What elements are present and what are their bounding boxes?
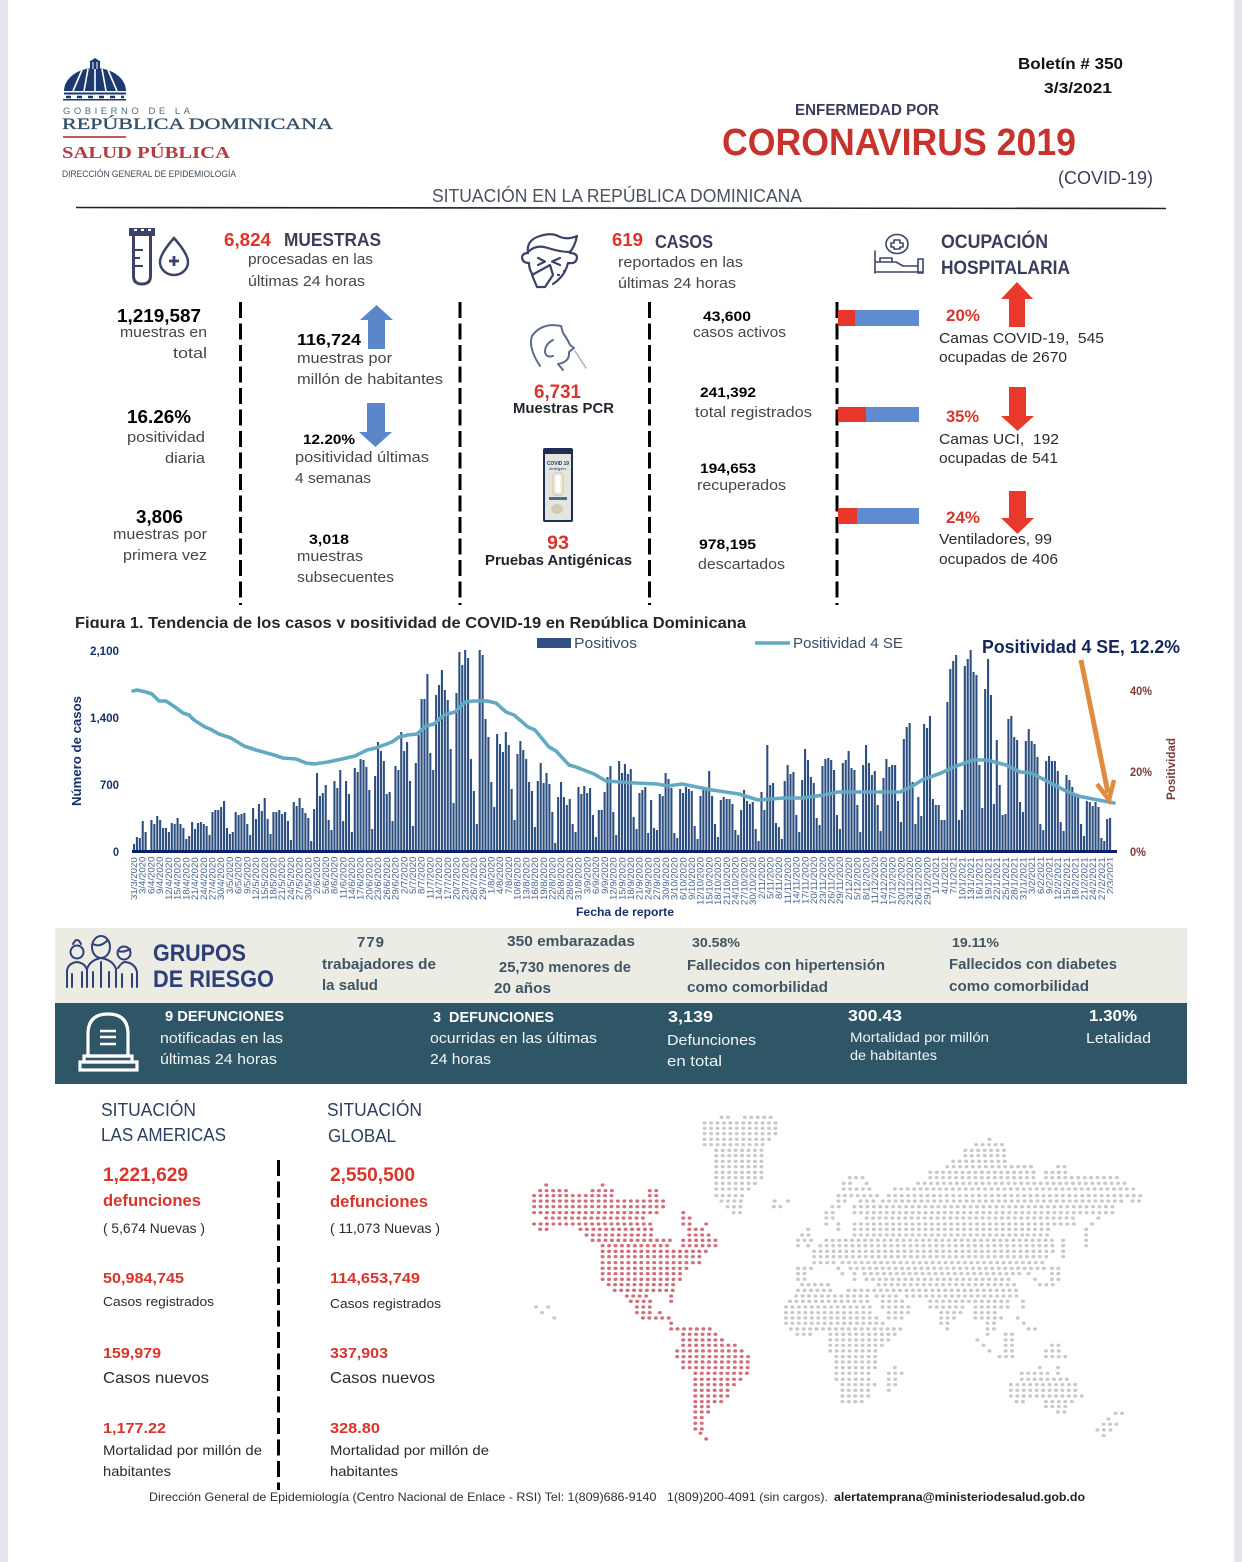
stat: embarazadas y menores [494, 933, 635, 997]
title: (COVID-19) [1058, 168, 1153, 188]
stat: pruebas antigénicas [485, 533, 632, 569]
stat: 9 defunciones [160, 1008, 284, 1068]
stat: casos activos [693, 308, 786, 341]
stat: descartados: 978,195 [699, 536, 756, 552]
chart: casos y positividad [69, 635, 1180, 919]
world map: dotted [534, 1117, 1141, 1439]
stat: trabajadores de la salud: trabajadores de [322, 956, 436, 973]
heading: global: SITUACIÓN [327, 1099, 422, 1120]
stat: primera vez: 3,806 [136, 507, 183, 527]
icon: antigen test kit: Antigen [549, 466, 566, 471]
stat: positividad 4 semanas [295, 431, 429, 487]
heading: grupos de riesgo [153, 940, 274, 993]
logo: gobierno de la república dominicana: GOBIERNO DE LA [63, 106, 191, 117]
header: muestras: últimas 24 horas [248, 273, 365, 290]
stat: mortalidad por millón: de habitantes [850, 1047, 937, 1063]
map: rest of the world [536, 1117, 1141, 1436]
map: the americas [534, 1185, 754, 1439]
left axis labels: 1,400 [90, 711, 119, 725]
footer [149, 1490, 1085, 1504]
heading: las américas: LAS AMERICAS [101, 1125, 226, 1145]
left axis labels [69, 644, 119, 859]
stat: camas covid-19: ocupadas de 2670 [939, 349, 1067, 366]
stat: casos nuevos américas [103, 1345, 209, 1387]
stat: mortalidad américas: habitantes [103, 1463, 171, 1479]
stat: embarazadas y menores: 350 embarazadas [507, 933, 635, 950]
stat: trabajadores de la salud: la salud [322, 977, 378, 994]
stat: positividad 4 semanas: 12.20% [303, 431, 356, 447]
legend [537, 635, 903, 652]
stat: positividad diaria: positividad [127, 429, 205, 446]
stat: casos registrados global: Casos registrados [330, 1296, 442, 1311]
stat: diabetes: como comorbilidad [949, 978, 1089, 995]
left axis labels: 0 [113, 845, 119, 859]
right axis labels [1130, 684, 1178, 859]
heading: ocupación hospitalaria: OCUPACIÓN [941, 231, 1048, 253]
stat: defunciones américas [103, 1165, 205, 1236]
stat: muestras en total: 1,219,587 [117, 306, 201, 326]
title: CORONAVIRUS 2019 [722, 122, 1076, 164]
stat: camas covid-19 [939, 306, 1104, 366]
icon: antigen test kit: COVID 19 [547, 461, 569, 467]
icon: antigen test kit [543, 448, 573, 522]
heading: las américas: SITUACIÓN [101, 1099, 196, 1120]
stat: total registrados: 241,392 [700, 384, 756, 400]
legend: Positividad 4 SE [793, 635, 903, 652]
stat: defunciones en total: en total [667, 1053, 722, 1070]
stat: pruebas antigénicas: Pruebas Antigénicas [485, 552, 632, 569]
panel: defunciones [55, 1003, 1187, 1084]
stat: casos registrados américas: Casos registrados [103, 1294, 215, 1309]
logo: gobierno de la república dominicana: DIRECCIÓN GENERAL DE EPIDEMIOLOGÍA [62, 169, 236, 179]
stat: mortalidad por millón: Mortalidad por millón [850, 1029, 989, 1045]
stat: letalidad [1086, 1008, 1151, 1047]
stat: total registrados [695, 384, 812, 421]
stat: letalidad: 1.30% [1089, 1008, 1137, 1025]
bar: camas uci [838, 407, 919, 422]
stat: casos activos: casos activos [693, 324, 786, 341]
stat: por millón [297, 332, 443, 388]
stat: casos nuevos américas: 159,979 [103, 1345, 161, 1362]
panel: casos [485, 230, 812, 573]
heading: figura 1: Figura 1. Tendencia de los casos y positividad de COVID-19 en República Dominicana [75, 615, 746, 632]
stat: subsecuentes: subsecuentes [297, 569, 394, 586]
stat: 9 defunciones: notificadas en las [160, 1030, 283, 1047]
arrow: down blue [359, 403, 392, 447]
stat: muestras en total: total [173, 345, 207, 362]
heading: global: GLOBAL [328, 1126, 396, 1146]
stat: defunciones américas: 1,221,629 [103, 1165, 188, 1186]
stat: por millón: 116,724 [297, 332, 361, 349]
header: casos: 619 [612, 230, 643, 250]
icon: tombstone [80, 1014, 137, 1070]
stat: camas covid-19: Camas COVID-19, 545 [939, 330, 1104, 347]
stat: 9 defunciones: 9 DEFUNCIONES [165, 1008, 284, 1025]
stat: casos nuevos américas: Casos nuevos [103, 1370, 209, 1387]
right axis labels: 0% [1130, 845, 1146, 859]
stat: casos nuevos global: Casos nuevos [330, 1370, 435, 1387]
stat: camas uci: Camas UCI, 192 [939, 431, 1059, 448]
stat: 3 defunciones: 3 DEFUNCIONES [433, 1009, 554, 1026]
stat: subsecuentes [297, 531, 394, 586]
stat: casos nuevos global [330, 1345, 435, 1387]
stat: defunciones américas: defunciones [103, 1191, 201, 1210]
left axis labels: 2,100 [90, 644, 119, 658]
stat: 3 defunciones [430, 1009, 597, 1068]
title [722, 102, 1153, 188]
stat: mortalidad global: 328.80 [330, 1420, 380, 1437]
header: casos: últimas 24 horas [618, 275, 736, 292]
panel: grupos de riesgo [55, 928, 1187, 1003]
stat: defunciones global: ( 11,073 Nuevas ) [330, 1220, 440, 1236]
right axis labels: 20% [1130, 765, 1152, 779]
icon: hospital bed [875, 234, 923, 273]
header: muestras: MUESTRAS [284, 230, 381, 250]
footer: alertatemprana@ministeriodesalud.gob.do [834, 1490, 1085, 1504]
stat: camas covid-19: 20% [946, 306, 980, 325]
panel: ocupación hospitalaria [838, 231, 1104, 568]
stat: defunciones américas: ( 5,674 Nuevas ) [103, 1220, 205, 1236]
stat: recuperados: 194,653 [700, 460, 756, 476]
arrow: down red [1001, 387, 1034, 431]
stat: positividad diaria: diaria [165, 450, 206, 467]
stat: 3 defunciones: ocurridas en las últimas [430, 1030, 597, 1047]
stat: muestras pcr [513, 382, 614, 417]
stat: descartados: descartados [698, 556, 785, 573]
stat: camas uci: 35% [946, 407, 979, 426]
stat: diabetes: Fallecidos con diabetes [949, 956, 1117, 973]
bars: positivos [134, 650, 1110, 851]
bar: camas covid [838, 310, 919, 326]
icon: people [67, 936, 137, 987]
stat: positividad 4 semanas: positividad últimas [295, 449, 429, 466]
stat: subsecuentes: muestras [297, 548, 363, 565]
stat: hipertensión [687, 935, 885, 996]
header: casos [612, 230, 743, 292]
line: positividad 4 se [133, 690, 1114, 803]
stat: casos registrados global: 114,653,749 [330, 1270, 420, 1287]
stat: muestras pcr: 6,731 [534, 382, 581, 403]
heading: las américas [101, 1099, 226, 1145]
heading: ocupación hospitalaria [941, 231, 1070, 279]
stat: mortalidad global: habitantes [330, 1463, 398, 1479]
stat: positividad 4 semanas: 4 semanas [295, 470, 371, 487]
stat: mortalidad américas: 1,177.22 [103, 1420, 166, 1437]
stat: hipertensión: 30.58% [692, 935, 740, 950]
arrow: up red [1001, 282, 1033, 327]
stat: casos nuevos global: 337,903 [330, 1345, 388, 1362]
stat: muestras en total: muestras en [120, 324, 207, 341]
stat: trabajadores de la salud: 779 [357, 934, 384, 951]
stat: primera vez [113, 507, 207, 564]
heading: ocupación hospitalaria: HOSPITALARIA [941, 258, 1070, 279]
legend: Positivos [574, 635, 637, 652]
stat: mortalidad global: Mortalidad por millón de [330, 1442, 489, 1458]
stat: diabetes: 19.11% [952, 935, 999, 950]
bulletin number and date: 3/3/2021 [1044, 80, 1112, 97]
stat: hipertensión: Fallecidos con hipertensión [687, 957, 885, 974]
stat: mortalidad por millón [848, 1008, 989, 1063]
heading: grupos de riesgo: DE RIESGO [153, 966, 274, 993]
x axis date labels: 31/3/2020 3/4/2020 6/4/2020 9/4/2020 12/4/2020 15/4/2020 18/4/2020 21/4/2020 24/4/2020 27/4/2020 30/4/2020 3/5/2020 6/5/2020 9/5/2020 12/5/2020 15/5/2020 18/5/2020 21/5/2020 24/5/2020 27/5/2020 30/5/2020 2/6/2020 5/6/2020 8/6/2020 11/6/2020 14/6/2020 17/6/2020 20/6/2020 23/6/2020 26/6/2020 29/6/2020 2/7/2020 5/7/2020 8/7/2020 11/7/2020 14/7/2020 17/7/2020 20/7/2020 23/7/2020 26/7/2020 29/7/2020 1/8/2020 4/8/2020 7/8/2020 10/8/2020 13/8/2020 16/8/2020 19/8/2020 22/8/2020 25/8/2020 28/8/2020 31/8/2020 3/9/2020 6/9/2020 9/9/2020 12/9/2020 15/9/2020 18/9/2020 21/9/2020 24/9/2020 27/9/2020 30/9/2020 3/10/2020 6/10/2020 9/10/2020 12/10/2020 15/10/2020 18/10/2020 21/10/2020 24/10/2020 27/10/2020 30/10/2020 2/11/2020 5/11/2020 8/11/2020 11/11/2020 14/11/2020 17/11/2020 20/11/2020 23/11/2020 26/11/2020 29/11/2020 2/12/2020 5/12/2020 8/12/2020 11/12/2020 14/12/2020 17/12/2020 20/12/2020 23/12/2020 26/12/2020 29/12/2020 1/1/2021 4/1/2021 7/1/2021 10/1/2021 13/1/2021 16/1/2021 19/1/2021 22/1/2021 25/1/2021 28/1/2021 31/1/2021 3/2/2021 6/2/2021 9/2/2021 12/2/2021 15/2/2021 18/2/2021 21/2/2021 24/2/2021 27/2/2021 2/3/2021 [131, 857, 1113, 905]
bulletin number and date [1018, 56, 1123, 97]
stat: muestras pcr: Muestras PCR [513, 400, 614, 417]
left axis labels: Número de casos [69, 696, 84, 806]
stat: mortalidad por millón: 300.43 [848, 1008, 902, 1025]
arrow: down red [1001, 491, 1034, 534]
stat: casos registrados américas: 50,984,745 [103, 1270, 184, 1287]
stat: camas uci [939, 407, 1059, 467]
icon: sneezing face [522, 234, 577, 287]
header: muestras: procesadas en las [248, 251, 373, 268]
stat: casos activos: 43,600 [703, 308, 751, 324]
stat: pruebas antigénicas: 93 [547, 533, 569, 554]
bar: ventiladores [838, 508, 919, 524]
stat: positividad diaria [127, 407, 206, 467]
footer: Dirección General de Epidemiología (Centro Nacional de Enlace - RSI) Tel: 1(809)686-9140 1(809)200-4091 (sin cargos). [149, 1490, 828, 1504]
stat: casos registrados américas [103, 1270, 215, 1309]
stat: mortalidad global [330, 1420, 489, 1479]
stat: defunciones global: defunciones [330, 1192, 428, 1211]
header: casos: reportados en las [618, 254, 743, 271]
stat: ventiladores: 24% [946, 508, 980, 527]
header: muestras: 6,824 [224, 230, 271, 250]
stat: embarazadas y menores: 25,730 menores de [499, 959, 631, 976]
arrow: up blue [360, 305, 393, 349]
icon: test tube and drop [129, 228, 188, 284]
panel: situación global [327, 1099, 489, 1479]
callout: positividad 4 se, 12.2%: Positividad 4 SE, 12.2% [982, 637, 1180, 657]
stat: primera vez: primera vez [123, 547, 207, 564]
stat: recuperados [697, 460, 786, 494]
title: ENFERMEDAD POR [795, 102, 939, 119]
stat: diabetes [949, 935, 1117, 995]
subtitle: situación en la república dominicana: SITUACIÓN EN LA REPÚBLICA DOMINICANA [432, 185, 802, 206]
stat: por millón: millón de habitantes [297, 371, 443, 388]
bulletin number and date: Boletín # 350 [1018, 56, 1123, 73]
stat: recuperados: recuperados [697, 477, 786, 494]
stat: embarazadas y menores: 20 años [494, 980, 551, 997]
left axis labels: 700 [100, 778, 119, 792]
stat: hipertensión: como comorbilidad [687, 979, 828, 996]
panel: muestras [113, 228, 443, 586]
stat: mortalidad américas: Mortalidad por millón de [103, 1442, 262, 1458]
stat: defunciones en total: Defunciones [667, 1032, 756, 1049]
stat: trabajadores de la salud [322, 934, 436, 994]
stat: 9 defunciones: últimas 24 horas [160, 1051, 277, 1068]
logo: gobierno de la república dominicana [62, 58, 334, 179]
stat: muestras en total [117, 306, 207, 362]
icon: nasal swab [531, 325, 586, 370]
right axis labels: Positividad [1164, 738, 1178, 800]
stat: ventiladores [939, 508, 1058, 568]
stat: defunciones en total: 3,139 [668, 1009, 713, 1026]
stat: primera vez: muestras por [113, 526, 207, 543]
stat: ventiladores: Ventiladores, 99 [939, 531, 1052, 548]
stat: positividad diaria: 16.26% [127, 407, 191, 427]
header: muestras [224, 230, 381, 290]
stat: camas uci: ocupadas de 541 [939, 450, 1058, 467]
stat: letalidad: Letalidad [1086, 1030, 1151, 1047]
stat: defunciones en total [667, 1009, 756, 1070]
heading: global [327, 1099, 422, 1146]
logo: gobierno de la república dominicana: REPÚBLICA DOMINICANA [62, 114, 334, 133]
icon: dome [63, 58, 126, 100]
right axis labels: 40% [1130, 684, 1152, 698]
stat: casos registrados global [330, 1270, 442, 1311]
stat: defunciones global [330, 1165, 440, 1236]
stat: ventiladores: ocupados de 406 [939, 551, 1058, 568]
x axis title: Fecha de reporte [576, 905, 674, 919]
header: casos: CASOS [655, 232, 713, 252]
stat: defunciones global: 2,550,500 [330, 1165, 415, 1186]
arrow: orange to last point [1081, 660, 1114, 800]
stat: por millón: muestras por [297, 350, 392, 367]
logo: gobierno de la república dominicana: SALUD PÚBLICA [62, 143, 231, 162]
stat: total registrados: total registrados [695, 404, 812, 421]
stat: mortalidad américas [103, 1420, 262, 1479]
stat: subsecuentes: 3,018 [309, 531, 349, 547]
heading: grupos de riesgo: GRUPOS [153, 940, 246, 967]
stat: 3 defunciones: 24 horas [430, 1051, 491, 1068]
panel: situación las américas [101, 1099, 262, 1479]
stat: descartados [698, 536, 785, 573]
